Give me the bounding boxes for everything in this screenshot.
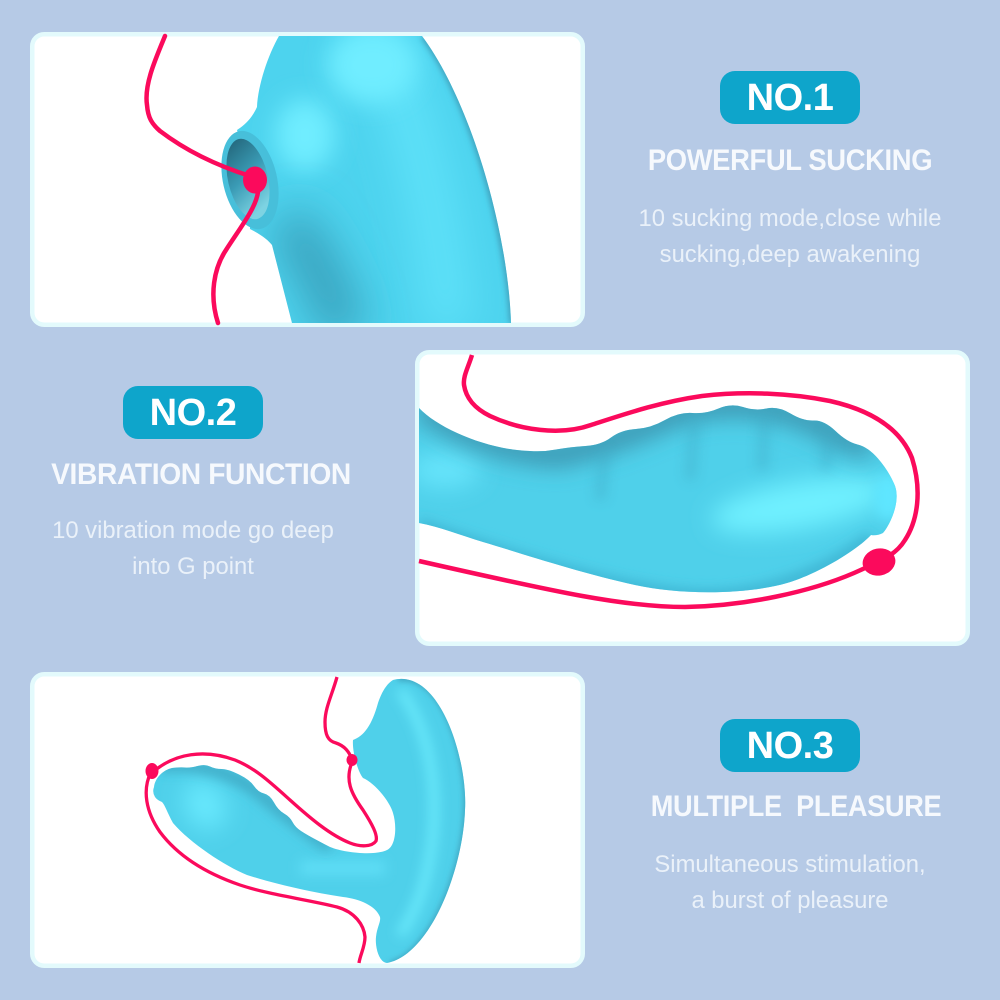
pink line: [146, 36, 258, 323]
pink dot: [860, 545, 898, 579]
description: Simultaneous stimulation,: [654, 851, 926, 878]
pink line: [419, 355, 918, 607]
description: [639, 205, 941, 268]
description: 10 sucking mode,close while: [639, 205, 941, 232]
text block: NO.1: [639, 71, 941, 268]
panel: sucking close-up: [30, 32, 585, 327]
pink dots: [146, 754, 358, 779]
heading: VIBRATION FUNCTION: [51, 458, 351, 491]
heading: MULTIPLE PLEASURE: [651, 790, 941, 823]
badge: NO.2: [150, 392, 236, 434]
description: a burst of pleasure: [691, 887, 889, 914]
description: [654, 851, 926, 914]
suction opening: [212, 125, 288, 235]
pink dot: [243, 166, 267, 194]
panel: full device: [30, 672, 585, 968]
badge: [720, 719, 860, 772]
panel: vibration close-up: [415, 350, 970, 646]
description: sucking,deep awakening: [660, 241, 920, 268]
text block: NO.2: [51, 386, 351, 580]
device shaft: [419, 405, 897, 592]
badge: NO.3: [747, 725, 833, 767]
description: into G point: [132, 553, 254, 580]
text block: NO.3: [651, 719, 941, 914]
heading: POWERFUL SUCKING: [648, 144, 932, 177]
badge: NO.1: [747, 77, 833, 119]
device: [153, 678, 466, 963]
badge: [123, 386, 263, 439]
pink lines: [146, 677, 376, 963]
description: [52, 517, 334, 580]
device body: [221, 36, 511, 323]
description: 10 vibration mode go deep: [52, 517, 334, 544]
badge: [720, 71, 860, 124]
